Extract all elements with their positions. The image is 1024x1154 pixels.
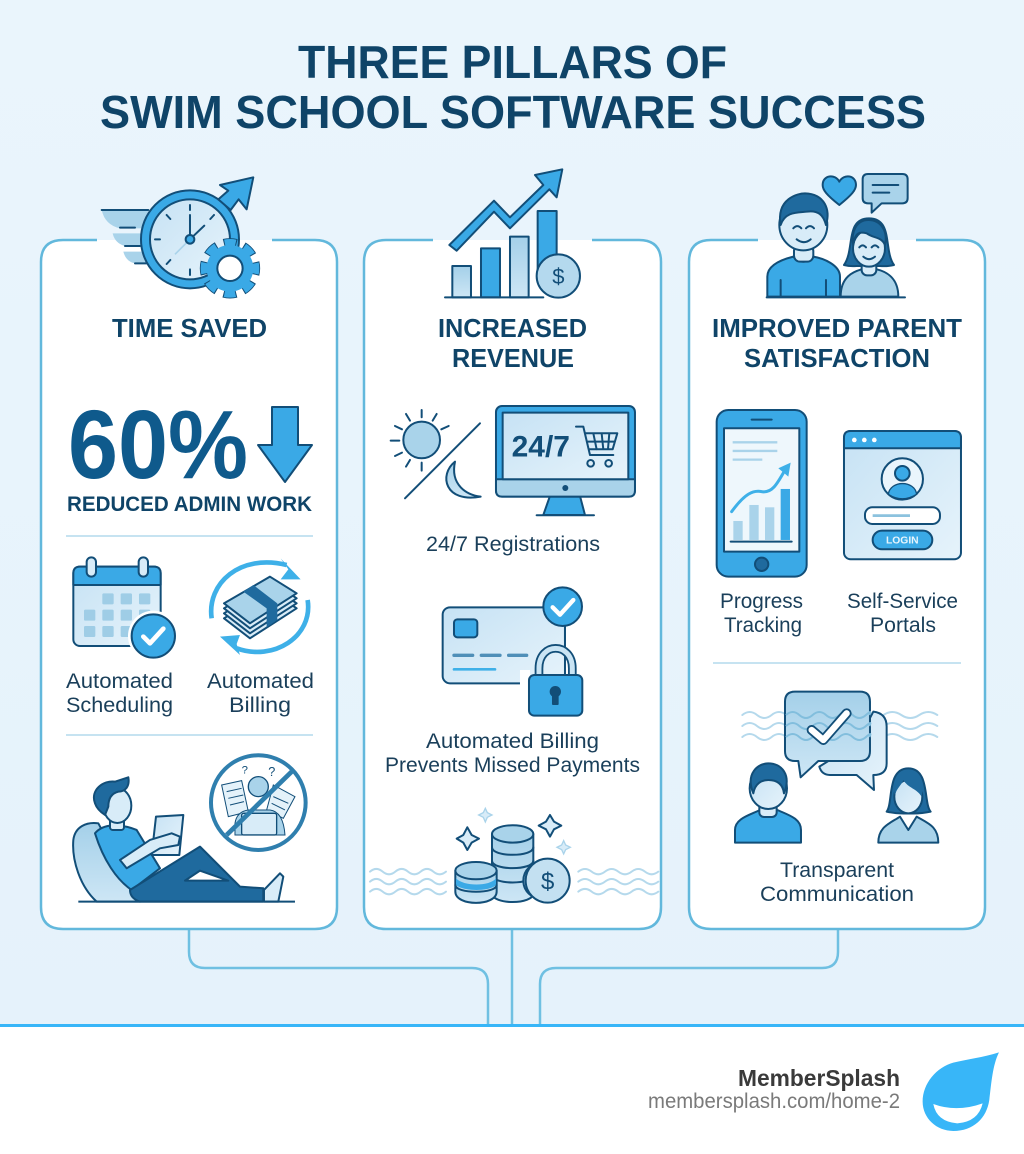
footer [0,1024,1024,1154]
label: Tracking [724,614,802,637]
title: THREE PILLARS OF [298,36,727,88]
panel: time saved [41,177,337,929]
label [760,859,914,906]
icon: coin stacks with waves: $ [541,868,554,895]
title [100,36,926,138]
heading [438,313,587,373]
icon: monitor with 24/7 cart [496,406,635,515]
icon: no paperwork sign [78,755,306,902]
heading: IMPROVED PARENT [712,313,962,343]
heading [712,313,962,373]
label: 24/7 Registrations [426,533,600,556]
brand name: MemberSplash [738,1065,900,1091]
icon: login portal: LOGIN [886,536,919,547]
label: Scheduling [66,694,173,717]
label: Automated Billing [426,730,599,753]
icon: card, lock and check [443,587,582,716]
label: Self-Service [847,590,958,613]
heading: SATISFACTION [744,343,930,373]
label: Prevents Missed Payments [385,754,640,777]
icon: clock with wings, arrow and gear [102,177,255,294]
icon: login portal [844,431,961,559]
label: Automated [207,670,314,693]
heading: TIME SAVED [112,313,267,343]
connector lines [189,929,838,1025]
panel: increased revenue [364,169,661,929]
logo: smiling drop [923,1052,999,1131]
label: Portals [870,614,936,637]
icon: revenue chart [445,169,580,298]
label [847,590,958,637]
icon: money stack with cycle arrows [211,558,308,655]
stat: 60%: 60% [68,390,248,499]
icon: coin stacks with waves [370,808,658,903]
label: Transparent [780,859,894,882]
icon: happy parents [767,174,908,297]
label: Progress [720,590,803,613]
label [720,590,803,637]
icon: revenue chart: $ [552,264,564,289]
icon: calendar with check [73,557,179,661]
heading: REVENUE [452,343,574,373]
icon: monitor with 24/7 cart: 24/7 [512,431,570,464]
label [385,730,640,777]
label: Communication [760,883,914,906]
panel: improved parent satisfaction [689,174,985,929]
heading: INCREASED [438,313,587,343]
label: Automated [66,670,173,693]
icon: no paperwork sign: ? [268,765,275,779]
label: Billing [229,694,291,717]
icon: sun and moon [391,410,481,498]
illustration: relaxed person with tablet [73,777,283,902]
brand url: membersplash.com/home-2 [648,1090,900,1113]
icon: no paperwork sign: ? [242,764,248,776]
stat label: REDUCED ADMIN WORK [67,493,312,516]
icon: down arrow [258,407,312,482]
icon: two people with chat bubbles [735,692,938,843]
icon: phone with progress chart [717,410,807,577]
title: SWIM SCHOOL SOFTWARE SUCCESS [100,86,926,138]
